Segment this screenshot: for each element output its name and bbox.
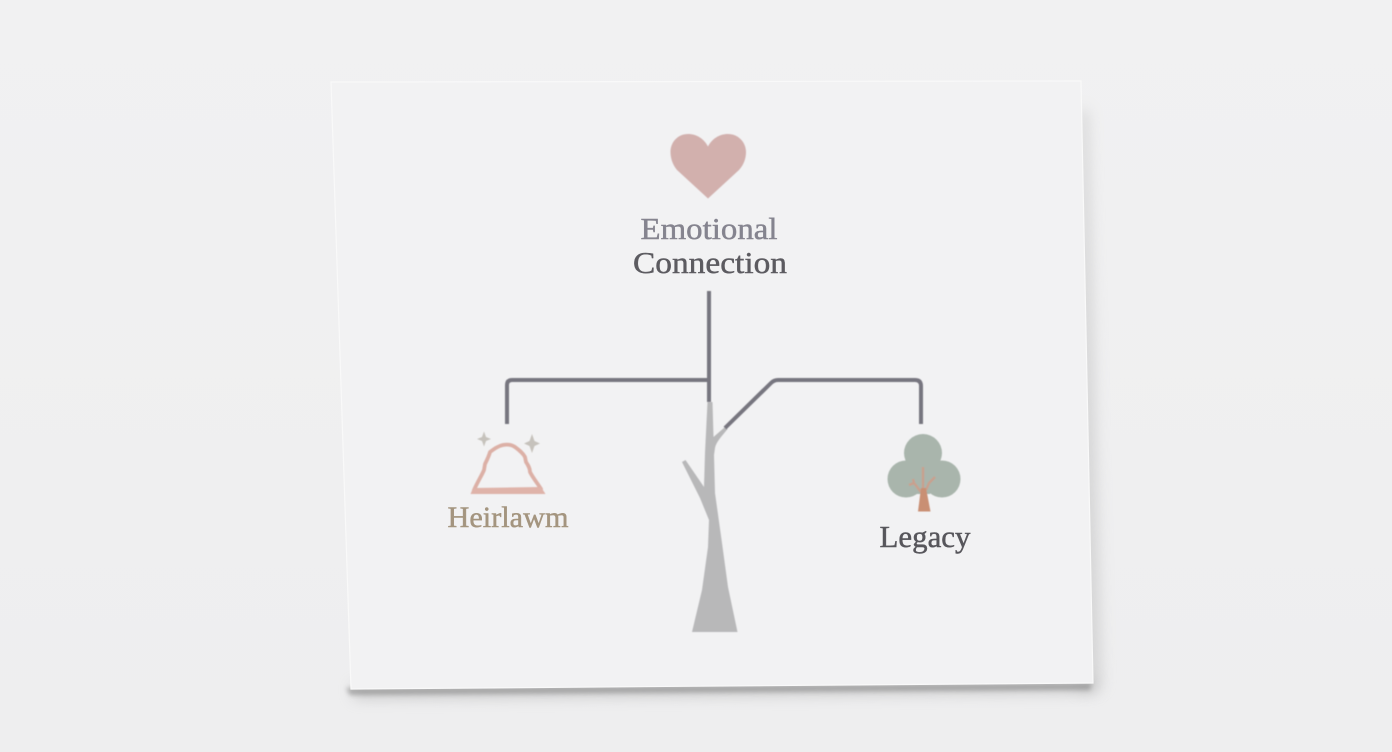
icon: clover tree: [888, 434, 960, 512]
heading: Emotional Connection: Emotional: [640, 211, 778, 246]
heading: Emotional Connection: [633, 211, 788, 280]
paper sheet: [331, 81, 1093, 689]
label: Legacy: Legacy: [880, 519, 971, 554]
tree trunk: [682, 402, 738, 632]
connector lines: [507, 291, 921, 428]
heading: Emotional Connection: Connection: [633, 245, 788, 280]
label: Heirlawm: Heirlawm: [448, 501, 568, 534]
icon: Heirlawm mound: [470, 432, 546, 494]
icon: heart: [670, 134, 746, 198]
paper shadow: [346, 108, 1102, 699]
